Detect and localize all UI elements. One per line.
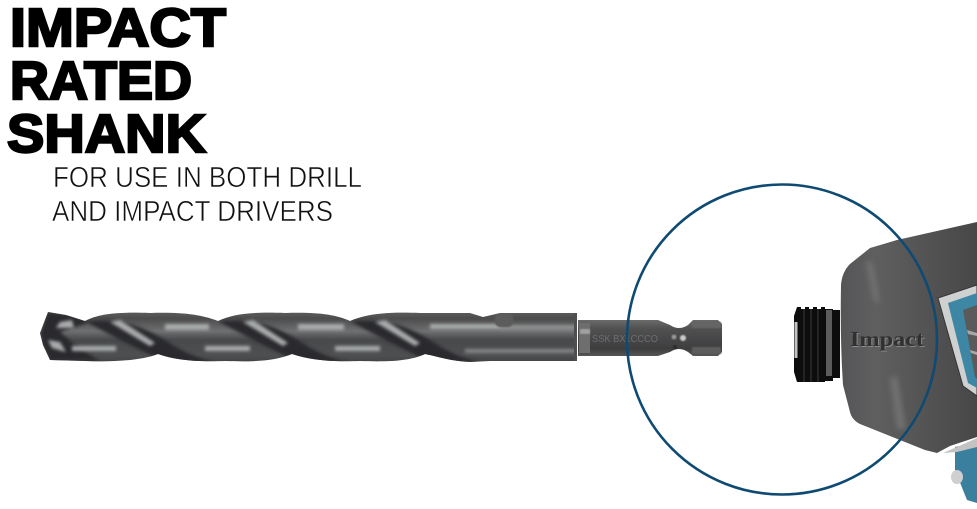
twist body [40, 312, 577, 362]
flutes [40, 312, 480, 362]
title: SHANK [7, 104, 206, 164]
impact emboss text: Impact [850, 327, 924, 351]
housing facets [866, 262, 906, 430]
teal window [948, 293, 977, 388]
hex shank [578, 320, 722, 356]
subtitle: FOR USE IN BOTH DRILL [53, 162, 362, 194]
housing [841, 222, 977, 453]
title [7, 0, 226, 164]
title: RATED [10, 51, 192, 111]
blue grip below [955, 442, 977, 503]
driver chuck [794, 307, 840, 382]
impact emboss text: Impact [851, 328, 925, 352]
shank marking: SSK BX1CCCO [592, 334, 658, 345]
window frame [938, 285, 977, 396]
subtitle: AND IMPACT DRIVERS [52, 196, 333, 228]
subtitle [52, 162, 362, 228]
impact driver [794, 222, 977, 503]
highlights [48, 320, 576, 353]
highlight circle [627, 184, 937, 494]
drill bit [40, 312, 722, 362]
